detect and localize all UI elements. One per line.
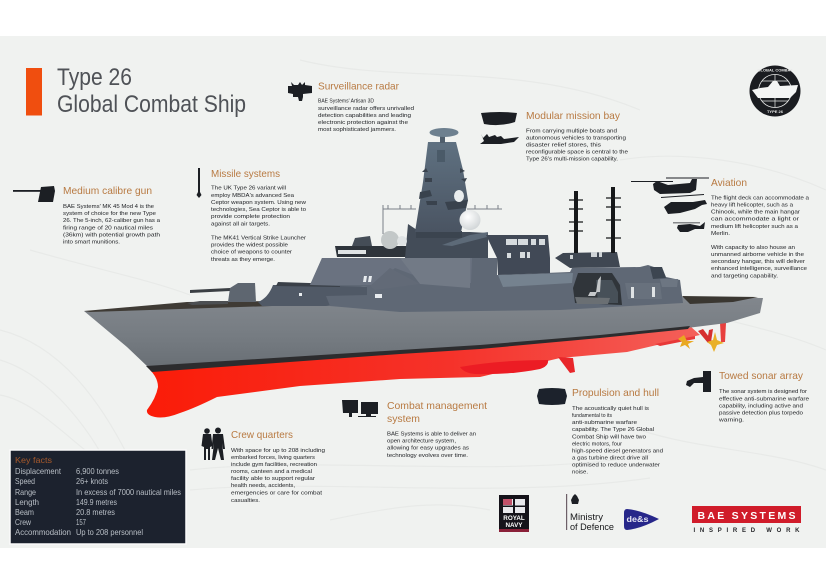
text block: Ceptor weapon system. Using new	[211, 200, 307, 206]
text block: With capacity to also house an	[711, 245, 795, 251]
text block: autonomous vehicles to transporting	[526, 136, 626, 142]
heading: Aviation	[711, 177, 747, 189]
forward mast yards	[383, 205, 502, 234]
text block: passive detection plus torpedo	[719, 410, 803, 416]
midships block and windows	[486, 235, 573, 287]
key facts rows: Up to 208 personnel	[76, 527, 143, 537]
hull markings	[299, 276, 382, 298]
mission bay opening	[573, 273, 622, 305]
logo: ministry of defence: Ministry	[570, 512, 604, 522]
text block: threats as they emerge.	[211, 257, 275, 263]
text block: high-speed diesel generators and	[572, 448, 663, 454]
text block: can accommodate a light or	[711, 216, 799, 222]
key facts rows: 149.9 metres	[76, 497, 117, 507]
boot-top waterline	[146, 326, 690, 372]
heading: Surveillance radar	[318, 80, 399, 92]
text block: medium lift helicopter such as a	[711, 224, 799, 230]
icon: gun	[13, 186, 55, 202]
heading: Crew quarters	[231, 429, 293, 441]
text block: provides the widest possible	[211, 242, 288, 248]
key facts heading: Key facts	[15, 455, 52, 465]
text block: Combat Ship will have two	[572, 434, 646, 440]
key facts rows: 157	[76, 517, 86, 527]
text block: effective anti-submarine warfare	[719, 396, 809, 402]
main superstructure	[310, 258, 683, 312]
main tower	[415, 142, 468, 232]
text block: enhanced intelligence, surveillance	[711, 266, 807, 272]
heading: Medium calibre gun	[63, 185, 152, 197]
text block: open architecture system,	[387, 439, 456, 445]
heading: system	[387, 413, 420, 425]
text block: rooms, canteen and a medical	[231, 469, 312, 475]
icon: crew figures	[202, 428, 225, 460]
text block: heavy lift helicopter, such as a	[711, 202, 794, 208]
title text: Global Combat Ship	[57, 91, 246, 118]
callout: modular mission bay	[480, 110, 628, 162]
key facts rows	[15, 466, 181, 537]
title	[26, 64, 246, 118]
heading: Towed sonar array	[719, 370, 804, 382]
text block: warning.	[718, 418, 744, 424]
icon: radar	[288, 82, 312, 101]
callout: missile systems	[196, 168, 307, 263]
text block: include gym facilities, recreation	[231, 462, 317, 468]
callout: surveillance radar	[288, 80, 414, 133]
key facts rows: Range	[15, 487, 36, 497]
bridge superstructure base	[405, 224, 488, 258]
text block: From carrying multiple boats and	[526, 128, 617, 134]
aft hangar panel	[625, 283, 662, 299]
text block: BAE Systems is able to deliver an	[387, 432, 476, 438]
text block: firing range of 20 nautical miles	[63, 226, 153, 232]
text block: BAE Systems' Artisan 3D	[318, 98, 374, 104]
text block: The UK Type 26 variant will	[211, 186, 286, 192]
text block: BAE Systems' MK 45 Mod 4 is the	[63, 204, 154, 210]
logo: global combat ship roundel	[750, 66, 800, 116]
callout: propulsion and hull	[537, 387, 663, 476]
text block: secondary hangar, this will deliver	[711, 259, 805, 265]
text block: most sophisticated jammers.	[318, 127, 396, 133]
text block: anti-submarine warfare	[572, 420, 637, 426]
key facts rows: Length	[15, 497, 39, 507]
text block: (36km) with potential growth path	[63, 232, 160, 238]
logo: global combat ship roundel: GLOBAL COMBAT	[757, 68, 793, 72]
icon: engine	[537, 388, 567, 405]
text block: casualties.	[231, 498, 260, 504]
text block: technologies, Sea Ceptor is able to	[211, 207, 306, 213]
logo: ministry of defence	[566, 494, 614, 532]
text block: optimised to reduce underwater	[572, 463, 660, 469]
grey hull	[84, 297, 763, 367]
heading: Combat management	[387, 400, 487, 412]
icon: mission bay	[481, 112, 517, 125]
text block: electric motors, four	[572, 441, 622, 447]
text block: facility able to support regular	[231, 476, 315, 482]
text block: against all air targets.	[211, 222, 270, 228]
logo: royal navy	[499, 495, 529, 532]
text block: and targeting capability.	[711, 274, 778, 280]
text block: allowing for easy upgrades as	[387, 446, 469, 452]
text block: noise.	[572, 470, 588, 476]
callout: crew quarters	[202, 428, 325, 504]
text block	[387, 432, 476, 459]
logo: bae systems	[692, 506, 801, 534]
text block	[63, 204, 161, 246]
aft hangar top	[650, 267, 666, 279]
text block	[231, 448, 325, 504]
heading	[387, 400, 487, 425]
callout: combat management system	[342, 400, 487, 459]
text block	[711, 196, 810, 280]
forecastle deck	[84, 301, 272, 312]
text block: The MK41 Vertical Strike Launcher	[211, 236, 306, 242]
text block	[211, 186, 307, 263]
logo: de&s: de&s	[626, 514, 649, 524]
text block: into smart munitions.	[63, 240, 120, 246]
key facts rows: Beam	[15, 507, 34, 517]
key facts rows: 20.8 metres	[76, 507, 115, 517]
text block: capability, including active and	[719, 403, 803, 409]
flight deck	[682, 296, 758, 304]
key facts rows: Displacement	[15, 466, 62, 476]
top surveillance radar	[430, 128, 458, 143]
text block	[718, 389, 809, 424]
text block: employ MBDA's advanced Sea	[211, 193, 295, 199]
rudder, struts and propellers	[655, 323, 726, 352]
forward radome	[381, 231, 399, 249]
aft block and windows	[555, 252, 620, 268]
logo: royal navy: ROYAL	[503, 515, 525, 522]
key facts rows: Crew	[15, 517, 32, 527]
logo: bae systems: INSPIRED WORK	[694, 528, 800, 534]
bridge	[335, 236, 413, 257]
text block: embarked forces, living quarters	[231, 455, 315, 461]
icon: monitors	[342, 400, 378, 417]
callout: medium calibre gun	[13, 185, 161, 246]
key facts rows: Speed	[15, 476, 35, 486]
logo: ministry of defence: of Defence	[570, 522, 614, 532]
text block	[526, 128, 628, 162]
heading: Propulsion and hull	[572, 387, 659, 399]
text block: Chinook, while the main hangar	[711, 210, 800, 216]
text block: electronic protection against the	[318, 120, 408, 126]
icon: sonar	[686, 371, 711, 392]
text block: health needs, accidents,	[231, 483, 295, 489]
text block: reconfigurable space is central to the	[526, 150, 628, 156]
text block: Type 26's multi-mission capability.	[526, 156, 618, 162]
icon: missile	[196, 168, 202, 198]
text block: a gas turbine direct drive all	[572, 455, 648, 461]
title text	[57, 64, 246, 118]
heading: Modular mission bay	[526, 110, 621, 122]
tower white domes	[397, 190, 480, 246]
logo: royal navy: NAVY	[505, 522, 523, 529]
callout: aviation	[631, 177, 810, 280]
text block: Merlin.	[711, 231, 730, 237]
logo: global combat ship roundel: TYPE 26	[767, 109, 784, 114]
title accent bar	[26, 68, 42, 116]
key facts rows: In excess of 7000 nautical miles	[76, 487, 181, 497]
text block: emergencies or care for combat	[231, 490, 322, 496]
logo: de&s	[624, 509, 659, 530]
icon: boat	[480, 134, 519, 144]
text block: technology evolves over time.	[387, 453, 468, 459]
text block: provide complete protection	[211, 214, 290, 220]
text block	[572, 406, 663, 476]
text block: choice of weapons to counter	[211, 250, 292, 256]
key facts rows: 6,900 tonnes	[76, 466, 119, 476]
ship illustration	[84, 128, 763, 418]
title text: Type 26	[57, 64, 132, 91]
text block: disaster relief stores, this	[526, 142, 601, 148]
text block: The acoustically quiet hull is	[572, 406, 649, 412]
text block: fundamental to its	[572, 413, 612, 419]
panel: key facts	[10, 450, 186, 544]
text block: capability. The Type 26 Global	[572, 427, 654, 433]
text block: The sonar system is designed for	[719, 389, 807, 395]
text block: The flight deck can accommodate a	[711, 196, 810, 202]
key facts rows: 26+ knots	[76, 476, 108, 486]
main gun	[187, 283, 256, 305]
callout: towed sonar array	[686, 370, 809, 424]
text block: surveillance radar offers unrivalled	[318, 106, 414, 112]
logo: bae systems: BAE SYSTEMS	[698, 510, 796, 522]
text block: detection capabilities and leading	[318, 113, 411, 119]
text block: unmanned airborne vehicle in the	[711, 252, 804, 258]
text block: 26. The 5-inch, 62-caliber gun has a	[63, 218, 161, 224]
text block: system of choice for the new Type	[63, 211, 156, 217]
red lower hull	[147, 326, 700, 418]
text block	[318, 98, 414, 133]
key facts rows: Accommodation	[15, 527, 71, 537]
text block: With space for up to 208 including	[231, 448, 325, 454]
heading: Missile systems	[211, 168, 280, 180]
vertical launch block	[258, 285, 367, 306]
twin masts	[569, 187, 621, 253]
icon: helicopters	[631, 178, 709, 232]
sonar bulge and fin	[460, 360, 548, 374]
